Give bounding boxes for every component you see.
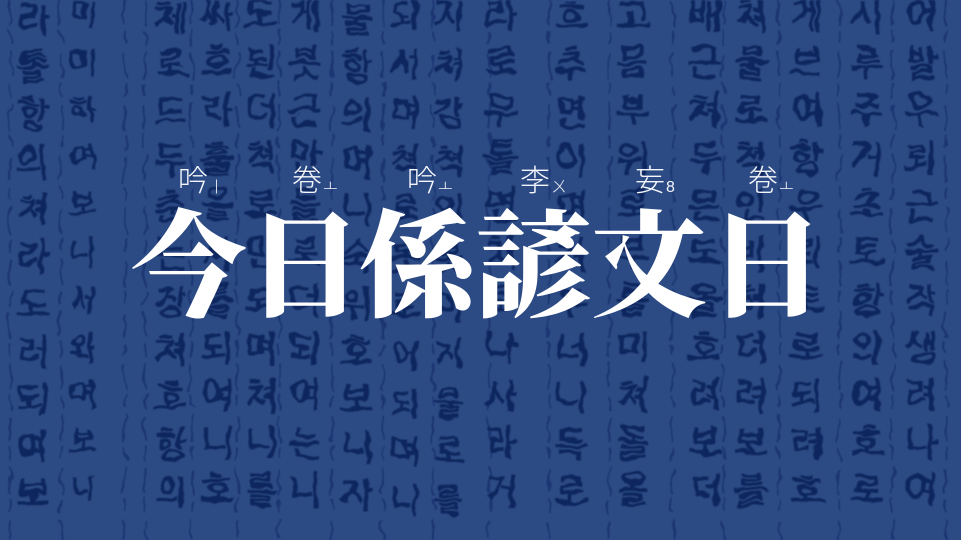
title character: 文 — [591, 205, 707, 333]
background: handwritten Korean manuscript: 되서며쳑로돗로어되며니 — [389, 0, 421, 534]
title character: 日 — [246, 205, 362, 333]
background: handwritten Korean manuscript: 미미하며보니서와며보니 — [69, 2, 97, 524]
background: handwritten Korean manuscript: 물항의며니숙위호보니자 — [340, 4, 374, 526]
title character: 諺 — [476, 205, 592, 333]
background: handwritten Korean manuscript: 싸흐라훌을사를되여니호 — [200, 0, 234, 522]
phonetic 2: 卷ㅗ — [292, 165, 338, 198]
background: handwritten Korean manuscript: 흐추면이며쳐우너니득로 — [554, 2, 588, 524]
background: handwritten Korean manuscript: 게브여항우뢰토로되려호 — [790, 0, 824, 522]
phonetic 6: 卷ㅗ — [748, 165, 794, 198]
phonetic 3: 吟ㅗ — [407, 165, 453, 198]
background: handwritten Korean manuscript: 쳐물로쳑인비허더려보를 — [734, 0, 768, 522]
title character: 係 — [360, 205, 476, 333]
title — [131, 205, 824, 333]
phonetic 5: 妄8 — [635, 165, 675, 198]
phonetic 1: 吟ㅣ — [178, 165, 224, 198]
background: handwritten Korean manuscript: 체로드두춘는장쳐호항의 — [154, 2, 188, 524]
background: handwritten Korean manuscript: 라로무톨면치로나사라거 — [484, 0, 518, 522]
background: handwritten Korean manuscript: 배근쳐두믄도올호려보더 — [688, 0, 722, 522]
background: handwritten Korean manuscript: 어발우뢰근술작생려나여 — [904, 0, 938, 522]
title character: 日 — [708, 205, 824, 333]
title character: 今 — [131, 205, 247, 333]
background: handwritten Korean manuscript: 도된더쳑로만되며쳐니를 — [244, 0, 278, 522]
background: handwritten Korean manuscript: 라톨항의쳐라도러되여보 — [16, 4, 50, 526]
phonetic 4: 李ㄨ — [520, 165, 567, 198]
background: handwritten Korean manuscript: 고믐부위로부를미쳐돌올 — [616, 0, 650, 522]
small phonetic glyphs — [178, 165, 794, 198]
background: handwritten Korean manuscript: 시루주거초토항의여호로 — [850, 0, 884, 522]
background: handwritten Korean manuscript: 게븟근만들로더되여는니 — [288, 0, 322, 522]
background: handwritten Korean manuscript: 지쳐감쳑의봇마지물로를 — [433, 0, 465, 534]
